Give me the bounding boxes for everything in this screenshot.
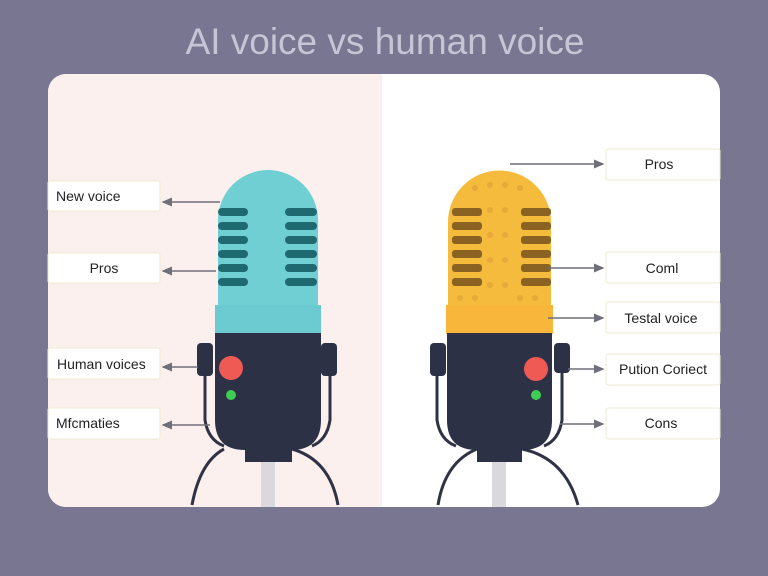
labels: Testal voice [624,310,698,326]
yellow human microphone [430,170,578,510]
teal AI microphone [192,170,338,510]
arrows [163,164,603,425]
labels: Pros [90,260,118,276]
panel: comparison card [48,74,720,510]
labels: New voice [56,188,121,204]
labels: Coml [646,260,678,276]
labels: Pros [645,156,673,172]
labels: Cons [645,415,677,431]
labels [48,149,720,439]
labels: Human voices [57,356,146,372]
labels: Mfcmaties [56,415,120,431]
labels: Pution Coriect [619,361,707,377]
title: AI voice vs human voice [186,21,584,62]
